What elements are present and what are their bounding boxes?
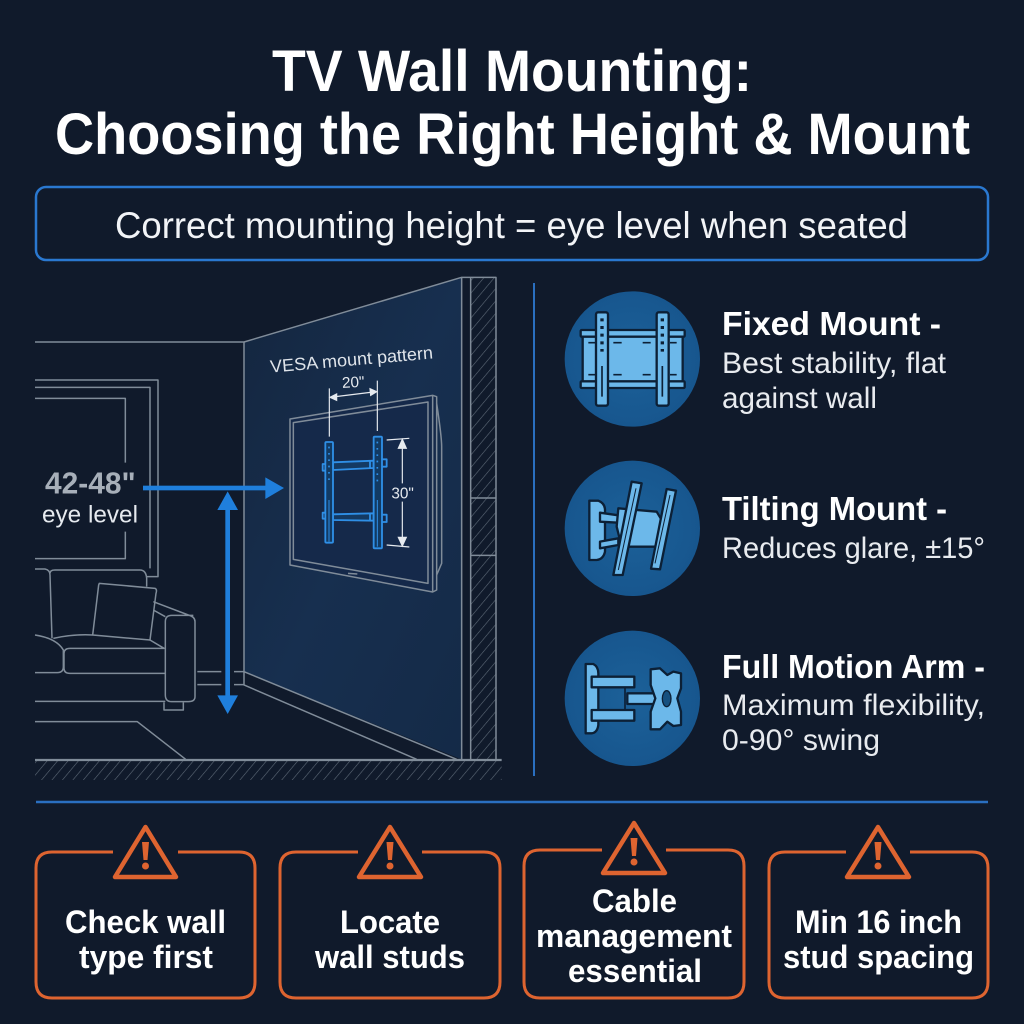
text: full motion arm: Maximum flexibility, — [722, 689, 985, 722]
title: Choosing the Right Height & Mount — [55, 102, 970, 167]
sofa — [35, 569, 195, 710]
dimension: 30 inch height: 30" — [391, 486, 414, 503]
eye level label: eye level — [42, 501, 138, 528]
text: fixed mount — [722, 305, 947, 415]
warning text: Check wall — [65, 904, 226, 940]
VESA label: VESA mount pattern — [269, 342, 434, 377]
TV — [290, 395, 442, 592]
warning text — [65, 904, 226, 975]
text: full motion arm: Full Motion Arm - — [722, 648, 985, 685]
dimension: 30 inch height — [387, 438, 414, 547]
warning text: stud spacing — [783, 939, 974, 975]
text: tilting mount: Tilting Mount - — [722, 490, 947, 527]
icon: full motion arm — [565, 631, 700, 766]
dimension: 20 inch width: 20" — [342, 374, 365, 392]
warning text: type first — [79, 939, 213, 975]
panel: warning cable management — [524, 823, 744, 998]
eye level label — [42, 466, 138, 528]
room outlines — [35, 277, 502, 760]
divider — [533, 283, 535, 776]
panel: warning check wall type — [36, 827, 255, 998]
text: fixed mount: Best stability, flat — [722, 347, 947, 380]
text: fixed mount: Fixed Mount - — [722, 305, 941, 342]
warning text — [314, 904, 465, 975]
VESA bracket — [323, 437, 387, 548]
warning text: Min 16 inch — [795, 904, 962, 940]
warning text — [536, 883, 732, 989]
arrow: eye level horizontal — [143, 477, 284, 499]
text: full motion arm — [722, 648, 985, 757]
callout: mounting height rule: Correct mounting height = eye level when seated — [115, 204, 908, 246]
callout: mounting height rule — [36, 187, 988, 260]
icon: warning triangle — [847, 827, 909, 877]
wall section hatch — [471, 277, 495, 759]
icon: warning triangle — [603, 823, 665, 873]
icon: fixed mount — [565, 291, 700, 427]
icon: tilting mount — [565, 461, 700, 596]
warning text — [783, 904, 974, 975]
eye level label: 42-48" — [45, 466, 136, 500]
title: TV Wall Mounting: — [272, 39, 752, 104]
wall face — [244, 277, 462, 759]
title — [55, 39, 970, 167]
panel: warning stud spacing — [769, 827, 988, 998]
dimension: 20 inch width — [329, 374, 377, 437]
panel: room scene diagram — [35, 277, 502, 780]
text: tilting mount: Reduces glare, ±15° — [722, 532, 985, 565]
warning text: management — [536, 918, 732, 954]
panel: warning locate studs — [280, 827, 500, 998]
floor hatch — [35, 761, 502, 780]
icon: warning triangle — [359, 827, 421, 877]
warning text: Cable — [592, 883, 677, 919]
warning text: essential — [568, 953, 702, 989]
text: tilting mount — [722, 490, 985, 565]
text: fixed mount: against wall — [722, 382, 877, 415]
panel: mount types — [565, 291, 985, 766]
text: full motion arm: 0-90° swing — [722, 724, 880, 757]
warning text: Locate — [340, 904, 440, 940]
icon: warning triangle — [115, 827, 176, 877]
arrow: height vertical — [217, 491, 238, 714]
warning text: wall studs — [314, 939, 465, 975]
divider — [36, 801, 988, 803]
